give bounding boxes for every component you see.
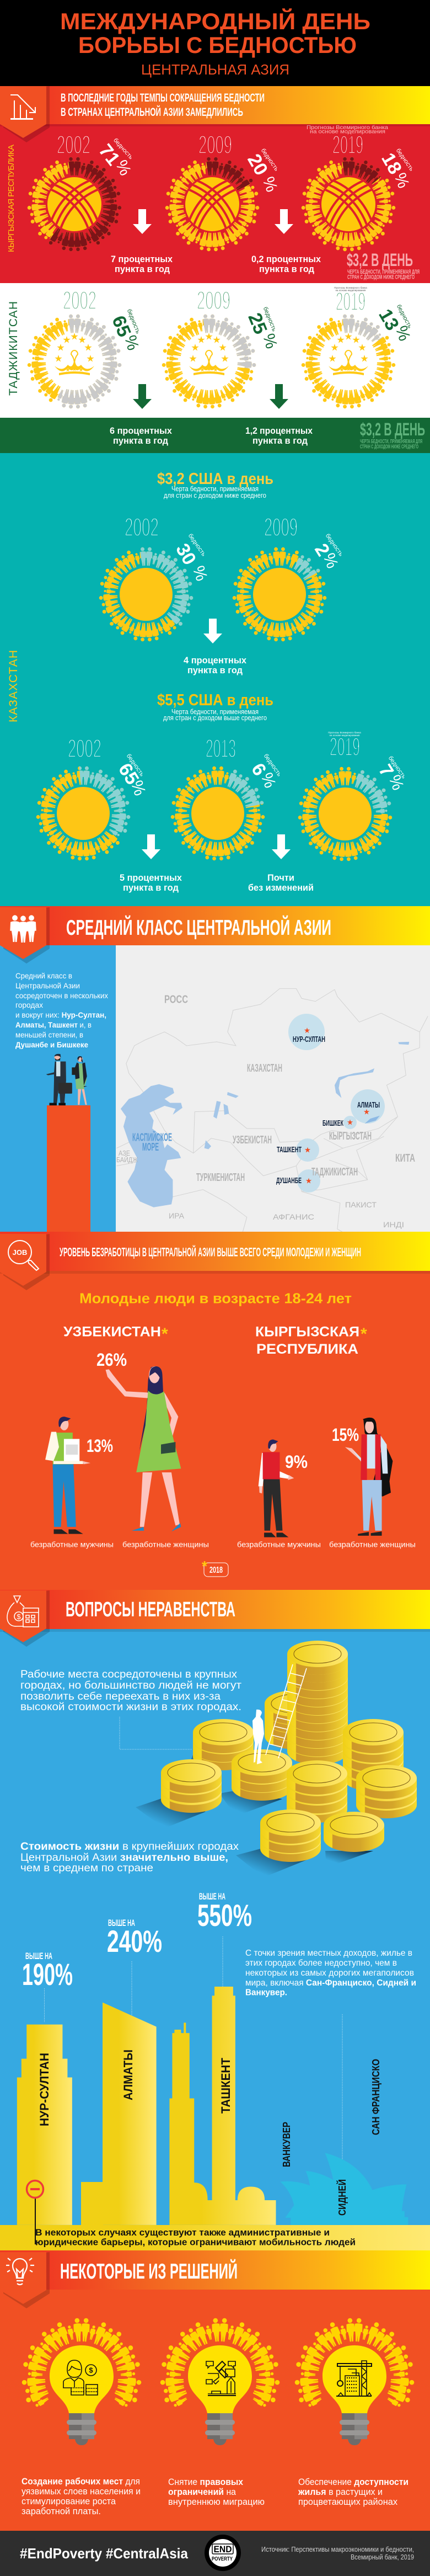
illustration: unemployed woman Kyrgyz Republic <box>345 1418 393 1536</box>
stat 240%: 240% <box>107 1924 162 1958</box>
gender labels <box>30 1541 416 1548</box>
poverty 65%: % <box>127 778 149 798</box>
banner <box>0 1232 430 1290</box>
country labels: КЫРГЫЗСТАН <box>329 1130 372 1142</box>
description: городах <box>15 1000 43 1009</box>
city labels: АЛМАТЫ <box>357 1100 380 1110</box>
poverty line heading $5.5: Черта бедности, применяемая <box>171 708 259 716</box>
source: Источник: Перспективы макроэкономики и бедности, <box>261 2546 414 2553</box>
person silhouette <box>252 1710 264 1764</box>
change 4 points: 4 процентных <box>184 655 247 666</box>
ring chart 2019 7% <box>298 767 393 861</box>
city circles <box>288 1014 385 1193</box>
year 2009: 2009 <box>264 513 298 541</box>
year 2013: 2013 <box>206 734 236 763</box>
poverty 13% <box>374 304 413 343</box>
forecast note: Прогнозы Всемирного банка <box>334 286 367 289</box>
illustration: coin stacks <box>136 1641 417 1877</box>
text: housing affordability: мира, включая Сан-Франциско, Сидней и <box>245 1978 416 1988</box>
title: МЕЖДУНАРОДНЫЙ ДЕНЬ <box>60 8 370 34</box>
country labels: ТУРКМЕНИСТАН <box>196 1172 245 1184</box>
banner <box>0 1590 430 1647</box>
text: jobs: стимулирование роста <box>22 2496 116 2506</box>
poverty 71%: % <box>112 157 135 178</box>
poverty 18% <box>377 147 415 190</box>
panel: Kyrgyz Republic <box>0 124 430 283</box>
source: Всемирный банк, 2019 <box>351 2553 414 2561</box>
poverty 13%: % <box>392 323 413 343</box>
city labels on towers <box>37 2050 381 2216</box>
poverty 30%: 30 <box>171 540 200 568</box>
text: housing affordability: некоторых из самых дорогих мегаполисов <box>245 1968 414 1978</box>
forecast note: на основе моделирования <box>336 289 366 291</box>
poverty 2% <box>310 533 345 571</box>
text: housing affordability: С точки зрения местных доходов, жилье в <box>245 1949 412 1958</box>
forecast note: Прогнозы Всемирного банка <box>307 124 388 131</box>
city labels: НУР-СУЛТАН <box>293 1035 325 1044</box>
country labels: ИРА <box>169 1211 185 1220</box>
poverty 71% <box>95 137 135 178</box>
panel: Kazakhstan <box>0 453 430 906</box>
icon: job search <box>8 1241 39 1270</box>
description: сосредоточен в нескольких <box>15 991 108 1000</box>
city labels on towers: ВАНКУВЕР <box>281 2122 292 2167</box>
year 2002: 2002 <box>57 130 90 159</box>
heading: ВОПРОСЫ НЕРАВЕНСТВА <box>66 1598 235 1621</box>
percent labels: 9% <box>285 1452 308 1472</box>
bulb: jobs <box>22 2318 142 2445</box>
heading: В СТРАНАХ ЦЕНТРАЛЬНОЙ АЗИИ ЗАМЕДЛИЛИСЬ <box>61 105 243 119</box>
change 1.2 points: пункта в год <box>252 435 308 446</box>
country labels: РОСС <box>164 993 188 1005</box>
poverty line heading $3.2 <box>157 470 273 499</box>
icon: declining chart <box>10 95 35 119</box>
city labels on towers: ТАШКЕНТ <box>219 2057 233 2114</box>
barrier sign <box>26 2181 43 2244</box>
Uzbekistan heading: * <box>162 1325 168 1343</box>
icon: money bag and calculator: $ <box>17 1612 21 1621</box>
change 7 points: 7 процентных <box>111 254 173 264</box>
poverty 65%: бедность <box>126 308 142 335</box>
poverty 20%: бедность <box>260 147 280 172</box>
text: housing: Обеспечение доступности <box>298 2477 409 2487</box>
change 5 points: 5 процентных <box>120 872 182 883</box>
panel: middle class text column <box>0 945 116 1232</box>
year 2002: 2002 <box>125 513 159 541</box>
change 6 points: пункта в год <box>113 435 168 446</box>
source <box>261 2546 414 2561</box>
Almaty tower <box>103 2003 157 2225</box>
bulb: housing <box>294 2318 415 2445</box>
poverty line heading $5.5: $5,5 США в день <box>157 691 273 709</box>
text: cost of living: Стоимость жизни в крупнейших городах <box>20 1841 239 1853</box>
footer <box>0 2531 430 2576</box>
Tashkent towers <box>169 1987 276 2225</box>
poverty 71%: 71 <box>95 140 124 169</box>
year note 2018 <box>202 1558 228 1577</box>
banner <box>0 2250 430 2308</box>
poverty 20%: 20 <box>243 151 272 179</box>
text: legal <box>168 2477 265 2507</box>
poverty 71%: бедность <box>112 137 135 161</box>
icon: job search: JOB <box>13 1248 27 1257</box>
stat 190%: ВЫШЕ НА <box>25 1951 52 1961</box>
poverty 20% <box>243 147 281 194</box>
poverty 13%: 13 <box>374 306 403 334</box>
forecast note <box>334 286 367 291</box>
description: Душанбе и Бишкеке <box>15 1040 88 1049</box>
heading: НЕКОТОРЫЕ ИЗ РЕШЕНИЙ <box>60 2259 238 2284</box>
panel: youth unemployment <box>0 1232 430 1590</box>
year note 2018: 2018 <box>209 1566 223 1575</box>
poverty 6%: бедность <box>262 753 283 778</box>
change 4 points: пункта в год <box>187 665 243 675</box>
change 5 points: пункта в год <box>123 882 179 893</box>
change 1.2 points: 1,2 процентных <box>245 425 313 436</box>
poverty 65% <box>114 753 149 798</box>
poverty 6%: 6 <box>247 759 270 780</box>
ring chart 2013 6% <box>170 766 265 861</box>
poverty 7%: 7 <box>374 760 397 781</box>
text: housing affordability: этих городах более недоступно, чем в <box>245 1958 397 1968</box>
text: jobs <box>22 2476 141 2516</box>
capital stars <box>304 1028 369 1183</box>
change 7 points: пункта в год <box>115 264 170 274</box>
forecast note <box>328 731 361 737</box>
city labels on towers: СИДНЕЙ <box>336 2179 348 2216</box>
illustration: unemployed woman Uzbekistan <box>106 1366 181 1531</box>
country labels: АФГАНИС <box>273 1212 314 1221</box>
poverty 25%: бедность <box>262 306 278 333</box>
poverty 25%: 25 <box>244 310 271 337</box>
icon: light bulb <box>6 2258 34 2285</box>
city labels: БИШКЕК <box>322 1119 343 1128</box>
stat 550% <box>197 1891 252 1933</box>
header background <box>0 0 430 86</box>
Uzbekistan heading: УЗБЕКИСТАН <box>63 1324 161 1340</box>
year 2019: 2019 <box>332 130 363 159</box>
poverty 2%: 2 <box>310 540 334 560</box>
logo: END <box>214 2544 232 2554</box>
poverty 65%: 65 <box>108 313 135 340</box>
country labels: ТАДЖИКИСТАН <box>311 1166 358 1178</box>
year note 2018: * <box>202 1558 208 1574</box>
leader line <box>120 1717 192 1749</box>
gender labels: безработные мужчины <box>237 1541 321 1548</box>
almost unchanged: без изменений <box>248 882 314 893</box>
gender labels: безработные женщины <box>122 1541 209 1548</box>
stat 240% <box>107 1918 162 1958</box>
panel: map of Central Asia <box>116 945 430 1250</box>
forecast note: на основе моделирования <box>310 128 385 135</box>
city labels: ТАШКЕНТ <box>277 1145 302 1154</box>
city labels: ДУШАНБЕ <box>276 1176 302 1185</box>
heading: В ПОСЛЕДНИЕ ГОДЫ ТЕМПЫ СОКРАЩЕНИЯ БЕДНОСТИ <box>61 92 265 104</box>
Nur-Sultan tower <box>17 2025 72 2225</box>
text: cost of living: Центральной Азии значительно выше, <box>20 1852 228 1864</box>
text: jobs concentrated: позволить себе переехать в них из-за <box>20 1691 221 1702</box>
change 0.2 points: пункта в год <box>259 264 314 274</box>
description: меньшей степени, в <box>15 1030 83 1039</box>
country label: КЫРГЫЗСКАЯ РЕСПУБЛИКА <box>7 145 16 252</box>
business people <box>46 1054 87 1105</box>
country label: ТАДЖИКИТСАН <box>7 301 20 396</box>
country labels: АЗЕ <box>119 1149 130 1157</box>
text: housing affordability: Ванкувер. <box>245 1988 287 1998</box>
poverty 65%: 65 <box>114 759 143 789</box>
ring chart 2009 25% <box>162 314 256 409</box>
change 6 points <box>110 425 173 446</box>
country labels: КАЗАХСТАН <box>247 1062 282 1074</box>
poverty line heading $3.2: Черта бедности, применяемая <box>171 485 259 493</box>
change 0.2 points: 0,2 процентных <box>251 254 321 264</box>
text: legal: внутреннюю миграцию <box>168 2497 265 2507</box>
bulb: jobs: $ <box>89 2366 93 2374</box>
text: legal: ограничений на <box>168 2487 236 2497</box>
change 7 points <box>111 254 173 274</box>
panel: Tajikistan <box>0 283 430 453</box>
panel: solutions <box>0 2250 430 2531</box>
description <box>15 971 108 1049</box>
text: housing affordability <box>245 1949 416 1998</box>
ring chart 2002 65% <box>27 314 122 409</box>
text: housing <box>298 2477 409 2507</box>
poverty line heading $5.5 <box>157 691 273 722</box>
ring chart 2002 71% <box>27 157 122 252</box>
stat 550%: ВЫШЕ НА <box>199 1891 225 1902</box>
ladder <box>266 1664 307 1758</box>
heading <box>61 92 265 119</box>
text: barriers: В некоторых случаях существуют также административные и <box>35 2227 330 2238</box>
text: jobs concentrated: Рабочие места сосредоточены в крупных <box>20 1669 238 1680</box>
text: housing: жилья в растущих и <box>298 2487 383 2497</box>
logo <box>205 2535 241 2571</box>
country labels: ПАКИСТ <box>345 1200 377 1209</box>
poverty 30% <box>171 533 211 583</box>
city labels <box>276 1035 380 1185</box>
arrow <box>203 619 222 643</box>
city labels on towers: АЛМАТЫ <box>121 2050 135 2100</box>
poverty 18%: бедность <box>395 147 415 172</box>
arrow <box>133 384 152 409</box>
ring chart 2019 18% <box>301 157 396 252</box>
ring chart 2009 20% <box>165 157 260 252</box>
poverty 18%: 18 <box>377 150 406 178</box>
city labels on towers: САН ФРАНЦИСКО <box>370 2059 381 2135</box>
percent labels: 15% <box>332 1425 359 1445</box>
year 2002: 2002 <box>63 286 96 315</box>
poverty line heading $3.2: $3,2 США в день <box>157 470 273 488</box>
year 2019: 2019 <box>330 732 360 761</box>
poverty 25%: % <box>259 332 281 350</box>
gender labels: безработные женщины <box>329 1541 416 1548</box>
text: cost of living: чем в среднем по стране <box>20 1862 153 1874</box>
change 6 points: 6 процентных <box>110 425 173 436</box>
year 2002: 2002 <box>68 734 101 763</box>
illustration: unemployed man Uzbekistan <box>45 1417 90 1534</box>
change 0.2 points <box>251 254 321 274</box>
ground strip <box>0 2225 430 2250</box>
country labels: УЗБЕКИСТАН <box>233 1134 272 1146</box>
country labels: БАЙДЖ <box>116 1156 138 1164</box>
poverty line note <box>347 250 420 280</box>
percent labels: 26% <box>96 1350 127 1370</box>
ring chart 2002 65% <box>36 766 131 861</box>
text: jobs: Создание рабочих мест для <box>22 2476 140 2487</box>
Kyrgyz Republic heading <box>255 1324 367 1357</box>
Almaty annex <box>81 2182 103 2225</box>
description: Алматы, Ташкент и, в <box>15 1020 92 1029</box>
forecast note: Прогнозы Всемирного банка <box>328 731 361 734</box>
poverty 30%: % <box>189 563 211 583</box>
pillar <box>47 1105 90 1232</box>
text: barriers <box>35 2227 356 2247</box>
ring chart 2002 30% <box>99 547 194 642</box>
poverty line heading $5.5: для стран с доходом выше среднего <box>163 714 267 722</box>
poverty 20%: % <box>259 174 281 194</box>
gender labels: безработные мужчины <box>30 1541 114 1548</box>
arrow <box>142 834 160 859</box>
ring chart 2009 2% <box>232 547 327 642</box>
description: Средний класс в <box>15 971 72 980</box>
arrow <box>270 384 288 409</box>
arrow <box>275 209 293 234</box>
text: jobs concentrated <box>20 1669 241 1713</box>
panel: banner poverty slowdown <box>0 86 430 142</box>
poverty 65%: % <box>121 333 142 352</box>
stat 550%: 550% <box>197 1898 252 1933</box>
country label: КАЗАХСТАН <box>7 650 20 722</box>
subtitle: ЦЕНТРАЛЬНАЯ АЗИЯ <box>141 61 289 78</box>
poverty 65%: бедность <box>125 753 146 778</box>
change 5 points <box>120 872 182 893</box>
Caspian Sea label: МОРЕ <box>142 1141 159 1153</box>
change 4 points <box>184 655 247 675</box>
Caspian Sea label: КАСПИЙСКОЕ <box>132 1130 172 1143</box>
Kyrgyz Republic heading: * <box>361 1325 367 1343</box>
text: jobs concentrated: высокой стоимости жизни в этих городах. <box>20 1701 241 1713</box>
text: legal: Снятие правовых <box>168 2477 243 2487</box>
arrow <box>133 209 152 234</box>
poverty 18%: % <box>390 171 413 190</box>
panel: inequality <box>0 1590 430 2250</box>
almost unchanged <box>248 872 314 893</box>
subheading: Молодые люди в возрасте 18-24 лет <box>79 1290 352 1307</box>
description: и вокруг них: Нур-Султан, <box>15 1010 106 1019</box>
percent labels: 13% <box>87 1436 113 1456</box>
ring chart 2019 13% <box>301 314 396 409</box>
panel: banner middle class <box>0 906 430 964</box>
forecast note <box>307 124 388 135</box>
title <box>60 8 370 58</box>
Kyrgyz Republic heading: КЫРГЫЗСКАЯ <box>255 1324 359 1340</box>
country labels <box>116 993 415 1229</box>
country labels: ИНДІ <box>383 1220 404 1229</box>
country labels: КИТА <box>395 1152 415 1164</box>
illustration: unemployed man Kyrgyz Republic <box>259 1439 294 1537</box>
poverty 6%: % <box>257 770 280 790</box>
text: cost of living <box>20 1841 239 1874</box>
almost unchanged: Почти <box>267 872 294 883</box>
text: jobs: уязвимых слоев населения и <box>22 2486 141 2497</box>
Kyrgyz Republic heading: РЕСПУБЛИКА <box>256 1342 358 1357</box>
arrow <box>272 834 291 859</box>
city labels on towers: НУР-СУЛТАН <box>37 2053 51 2126</box>
poverty 7% <box>374 755 407 792</box>
poverty 13%: бедность <box>395 304 413 329</box>
poverty 7%: % <box>385 773 407 792</box>
poverty 7%: бедность <box>387 755 407 780</box>
stat 190% <box>22 1951 73 1992</box>
dotted leaders <box>44 1936 342 2160</box>
poverty 2%: % <box>319 551 342 571</box>
stat 240%: ВЫШЕ НА <box>108 1918 135 1928</box>
poverty line heading $3.2: для стран с доходом ниже среднего <box>164 492 266 499</box>
percent labels <box>87 1350 359 1472</box>
text: barriers: юридические барьеры, которые ограничивают мобильность людей <box>35 2237 356 2247</box>
icon: money bag and calculator <box>7 1596 39 1627</box>
poverty 6% <box>247 753 283 790</box>
year 2009: 2009 <box>197 286 230 315</box>
logo: POVERTY <box>212 2556 233 2562</box>
poverty 2%: бедность <box>324 533 345 557</box>
title: БОРЬБЫ С БЕДНОСТЬЮ <box>78 32 357 58</box>
text: jobs concentrated: городах, но большинство людей не могут <box>20 1680 241 1691</box>
hashtags: #EndPoverty #CentralAsia <box>20 2545 188 2562</box>
map shapes <box>116 988 428 1250</box>
text: jobs: заработной платы. <box>22 2506 101 2516</box>
year 2009: 2009 <box>198 130 232 159</box>
Sydney opera silhouette <box>280 2153 408 2225</box>
Caspian Sea label <box>132 1130 172 1153</box>
change 1.2 points <box>245 425 313 446</box>
stat 190%: 190% <box>22 1957 73 1992</box>
year 2019: 2019 <box>336 287 366 316</box>
description: Центральной Азии <box>15 981 80 990</box>
poverty 65% <box>108 308 142 352</box>
poverty 25% <box>244 306 281 350</box>
poverty line note <box>360 419 425 450</box>
poverty 30%: бедность <box>187 533 207 557</box>
icon: three people <box>10 915 36 943</box>
Issyk-Kul lake <box>365 1116 380 1124</box>
bulb: legal <box>160 2318 280 2445</box>
forecast note: на основе моделирования <box>330 734 360 737</box>
text: housing: процветающих районах <box>298 2497 397 2507</box>
